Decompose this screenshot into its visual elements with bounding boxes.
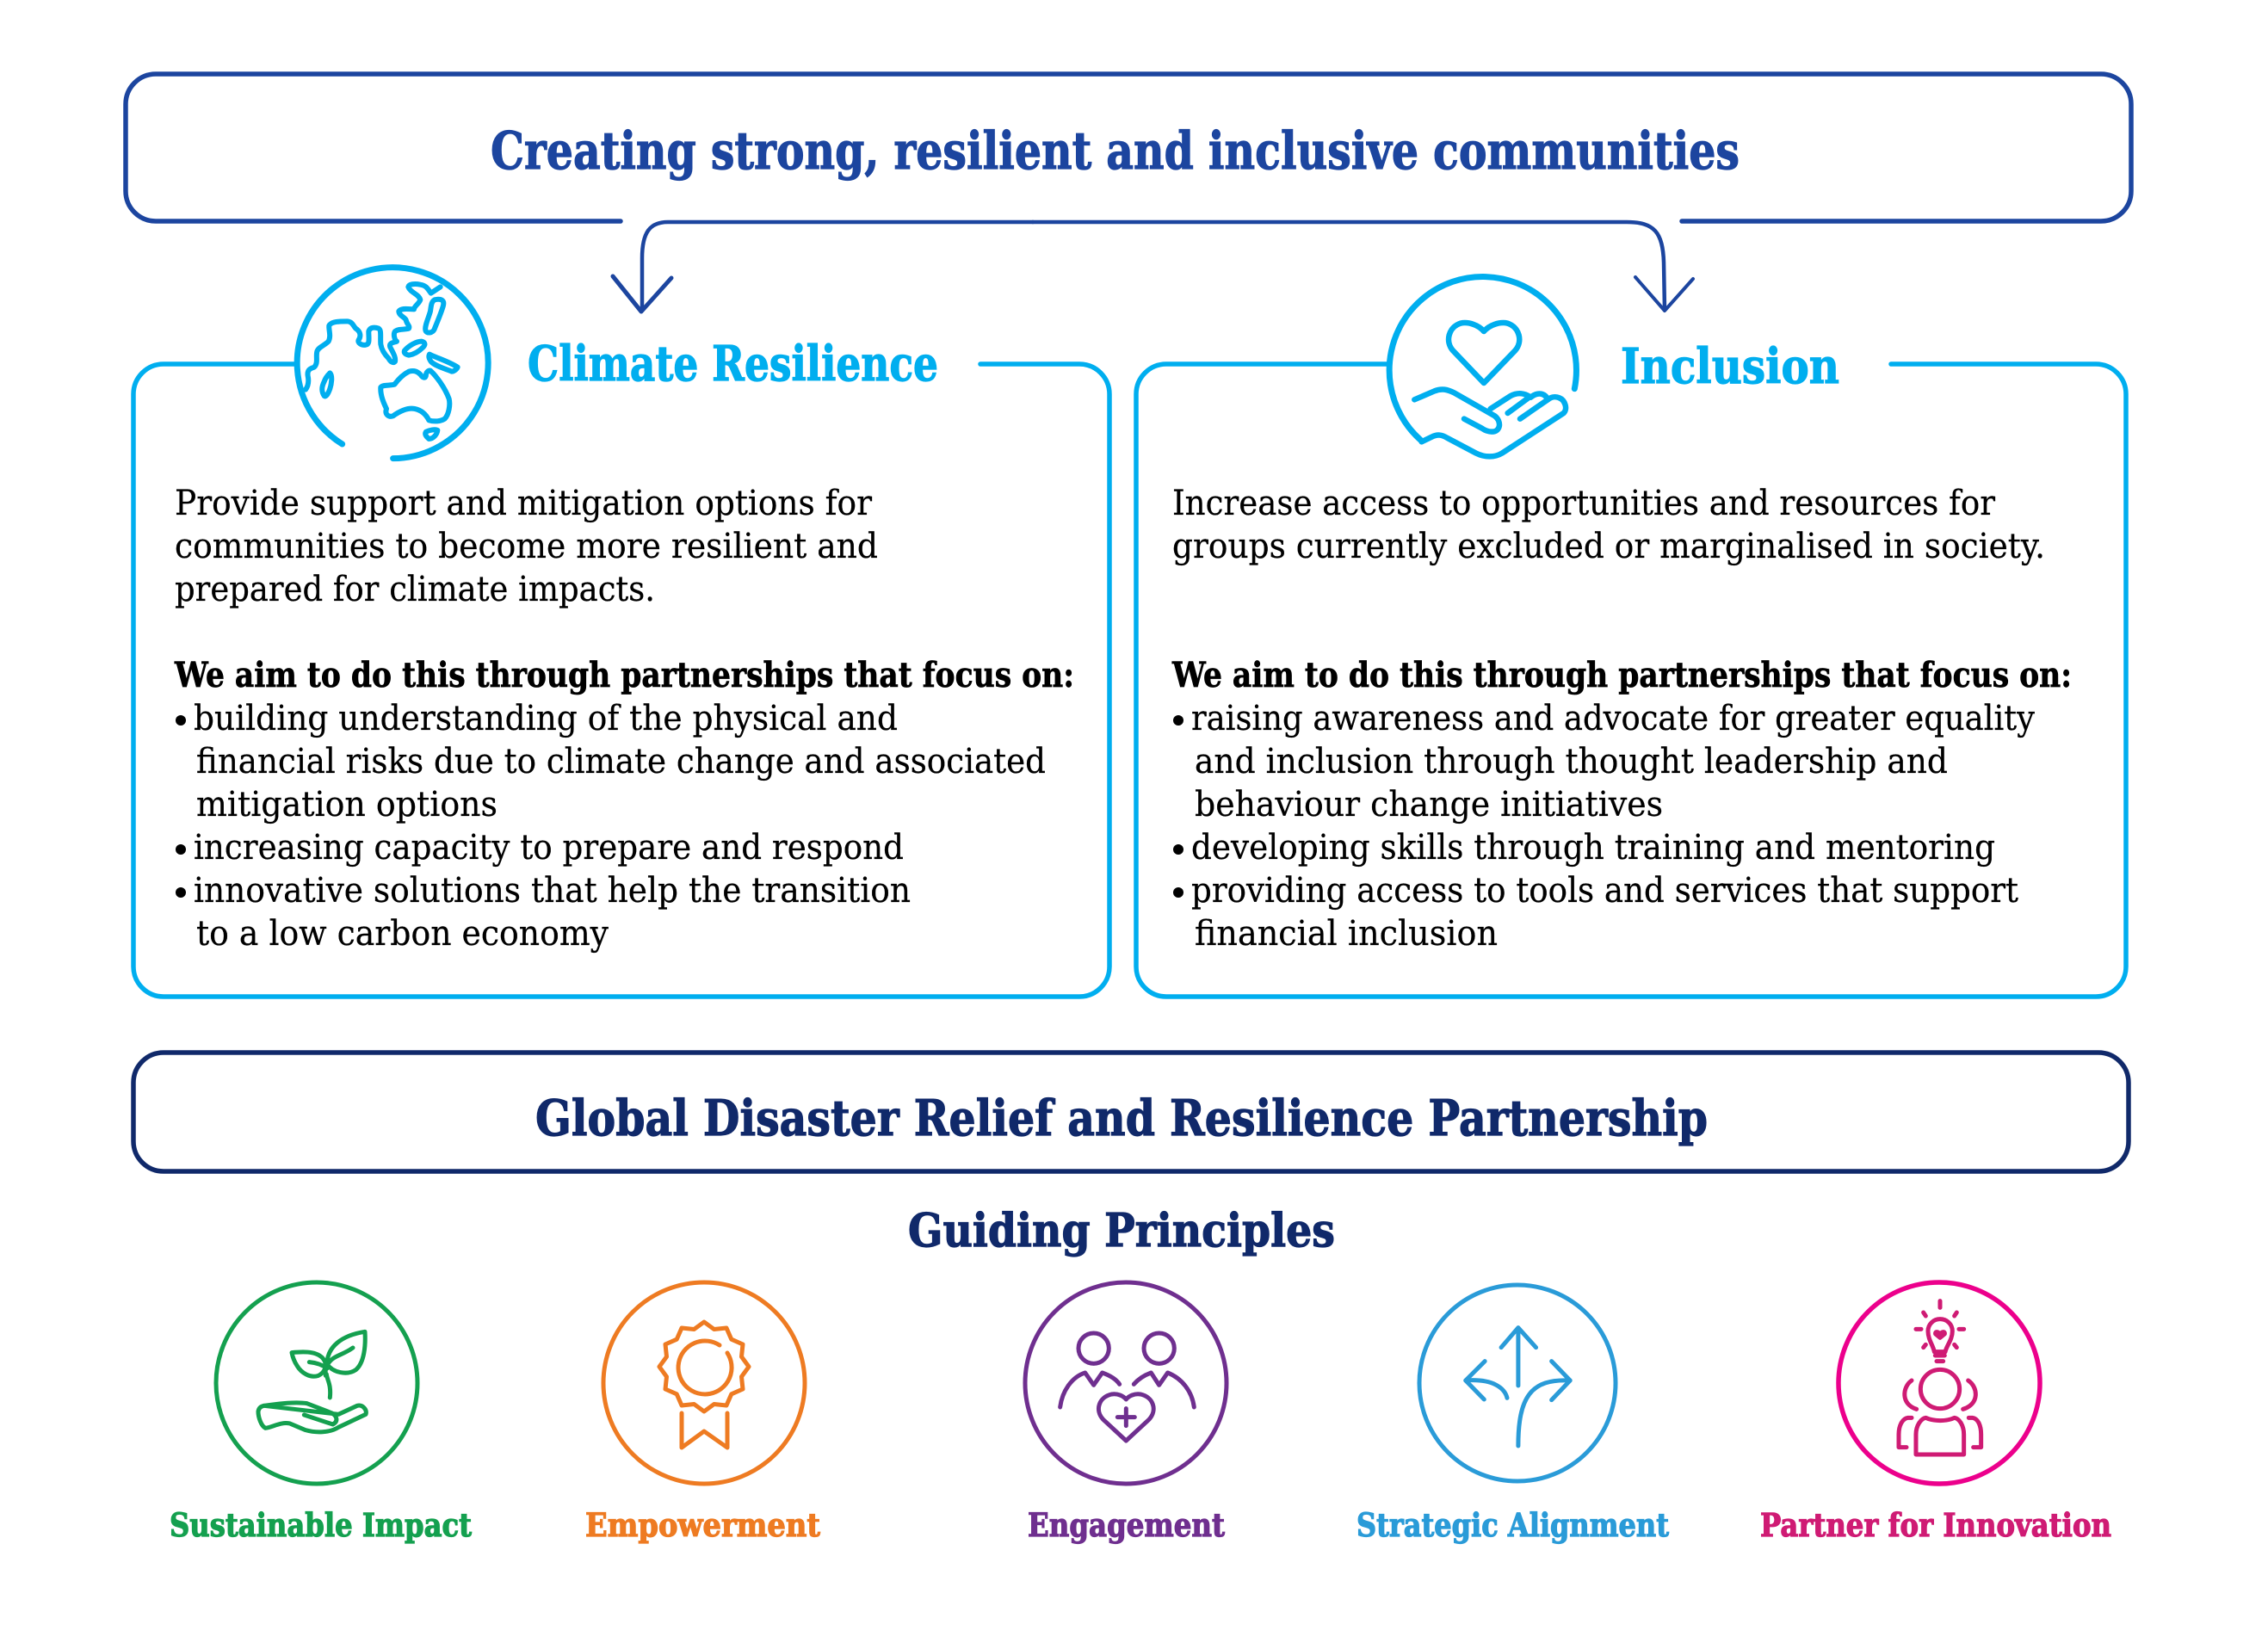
text block: inclusion focus list bbox=[1171, 655, 2072, 954]
label: strategic alignment: Strategic Alignment bbox=[1356, 1506, 1669, 1544]
text block: climate resilience focus list: innovative solutions that help the transition bbox=[194, 871, 911, 911]
text block: climate resilience focus list: mitigation options bbox=[196, 785, 497, 824]
principle: sustainable impact bbox=[170, 1282, 472, 1544]
icon: heart in hand bbox=[1389, 277, 1576, 456]
arrow: banner to climate resilience and inclusion bbox=[613, 222, 1693, 312]
text block: inclusion focus list: developing skills through training and mentoring bbox=[1191, 828, 1995, 868]
label: empowerment: Empowerment bbox=[585, 1506, 820, 1544]
text block: climate resilience intro: Provide support and mitigation options for bbox=[175, 484, 873, 523]
principle: partner for innovation bbox=[1760, 1282, 2111, 1544]
text block: inclusion focus list: financial inclusion bbox=[1195, 914, 1498, 954]
principle: strategic alignment bbox=[1356, 1285, 1669, 1544]
label: engagement: Engagement bbox=[1028, 1506, 1225, 1544]
panel: inclusion bbox=[1136, 277, 2126, 997]
panel: top banner bbox=[126, 74, 2131, 221]
text block: climate resilience intro: prepared for climate impacts. bbox=[175, 570, 655, 609]
text block: climate resilience intro: communities to become more resilient and bbox=[175, 527, 878, 566]
panel: partnership banner bbox=[133, 1053, 2129, 1171]
text block: inclusion focus list: We aim to do this through partnerships that focus on: bbox=[1171, 655, 2072, 695]
panel: climate resilience bbox=[133, 268, 1109, 997]
heading: partnership name: Global Disaster Relief and Resilience Partnership bbox=[535, 1090, 1708, 1147]
icon: plant in hand bbox=[216, 1282, 417, 1484]
text block: climate resilience focus list bbox=[174, 655, 1074, 954]
icon: award rosette bbox=[603, 1282, 805, 1484]
icon: globe bbox=[297, 268, 488, 459]
text block: inclusion focus list: behaviour change initiatives bbox=[1195, 785, 1663, 824]
text block: climate resilience focus list: We aim to do this through partnerships that focus on: bbox=[174, 655, 1074, 695]
text block: inclusion intro: groups currently excluded or marginalised in society. bbox=[1172, 527, 2045, 566]
text block: inclusion focus list: providing access to tools and services that support bbox=[1191, 871, 2018, 911]
text block: inclusion intro: Increase access to opportunities and resources for bbox=[1172, 484, 1996, 523]
text block: climate resilience intro bbox=[175, 484, 878, 609]
heading: climate resilience: Climate Resilience bbox=[528, 336, 938, 392]
text block: inclusion focus list: and inclusion through thought leadership and bbox=[1195, 742, 1948, 781]
icon: branching arrows bbox=[1419, 1285, 1616, 1481]
text block: inclusion focus list: raising awareness and advocate for greater equality bbox=[1191, 699, 2035, 738]
text block: climate resilience focus list: to a low carbon economy bbox=[196, 914, 609, 954]
text block: climate resilience focus list: financial risks due to climate change and associated bbox=[196, 742, 1046, 781]
heading: inclusion: Inclusion bbox=[1621, 338, 1839, 395]
label: sustainable impact: Sustainable Impact bbox=[170, 1506, 472, 1544]
text block: climate resilience focus list: building understanding of the physical and bbox=[194, 699, 898, 738]
label: partner for innovation: Partner for Innovation bbox=[1760, 1506, 2111, 1544]
icon: person with lightbulb bbox=[1839, 1282, 2040, 1484]
text block: inclusion intro bbox=[1172, 484, 2045, 566]
title: Creating strong, resilient and inclusive communities bbox=[491, 121, 1740, 182]
principle: empowerment bbox=[585, 1282, 820, 1544]
text block: climate resilience focus list: increasing capacity to prepare and respond bbox=[194, 828, 904, 868]
heading: guiding principles: Guiding Principles bbox=[908, 1204, 1335, 1257]
icon: two people with heart bbox=[1025, 1282, 1227, 1484]
principle: engagement bbox=[1025, 1282, 1227, 1544]
